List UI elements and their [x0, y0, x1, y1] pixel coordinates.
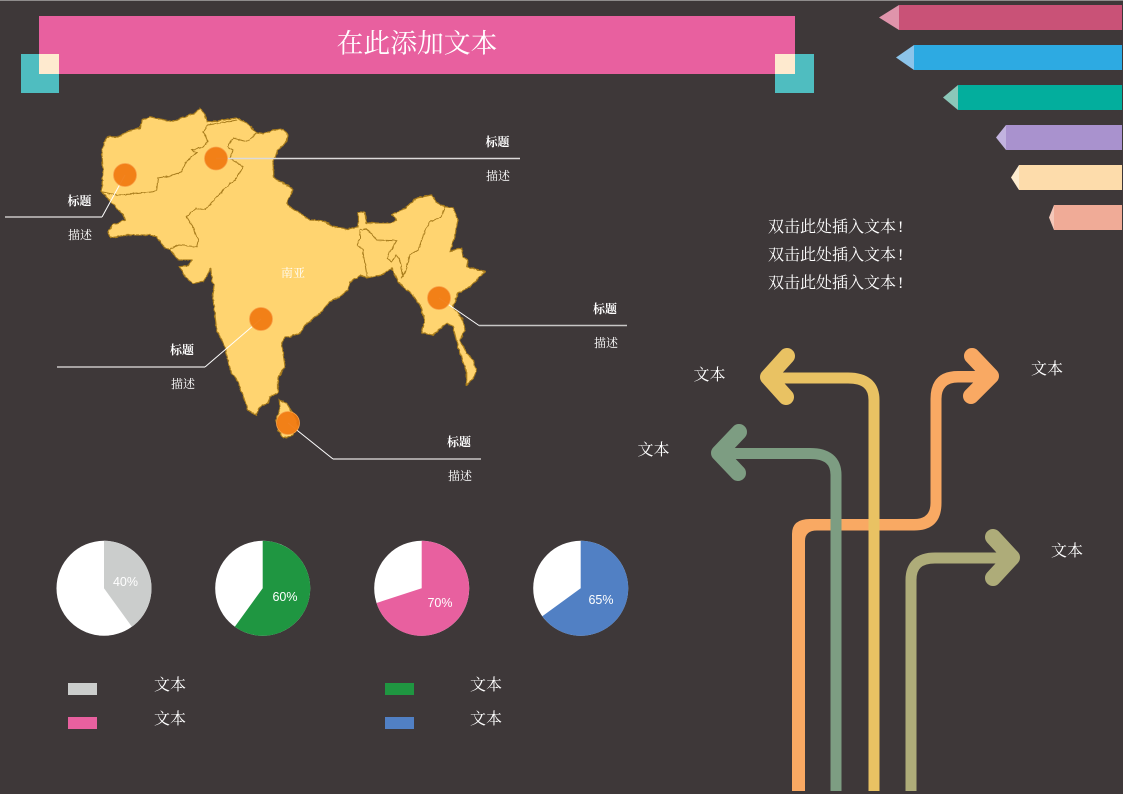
pie chart: 40%: 40% — [113, 575, 138, 589]
pie chart: 65% — [533, 541, 628, 636]
arrow labels: 文本 — [1051, 542, 1083, 560]
map marker: Pakistan callout — [204, 134, 520, 183]
map marker: Myanmar callout: 描述 — [594, 335, 618, 350]
map marker: Sri Lanka callout — [276, 412, 481, 483]
map marker: India callout: 描述 — [171, 376, 195, 391]
arrow labels: 文本 — [694, 366, 726, 384]
legend: 文本 — [154, 710, 186, 728]
text block: 双击此处插入文本! — [768, 217, 903, 236]
map marker: Sri Lanka callout: 描述 — [448, 468, 472, 483]
pie chart: 65%: 65% — [588, 593, 614, 607]
map marker: Sri Lanka callout: 标题 — [447, 434, 471, 449]
pie chart: 40% — [56, 541, 152, 636]
title banner — [21, 16, 814, 93]
text block — [768, 217, 903, 292]
legend: 文本 — [470, 676, 502, 694]
map: South Asia — [102, 108, 485, 438]
title banner: 在此添加文本 — [337, 28, 497, 58]
arrow labels: 文本 — [638, 441, 670, 459]
legend: 文本 — [470, 710, 502, 728]
legend — [68, 676, 502, 729]
map marker: Afghanistan callout — [5, 164, 136, 242]
map marker: Afghanistan callout: 标题 — [67, 193, 92, 208]
pie chart: 70% — [374, 541, 469, 636]
text block: 双击此处插入文本! — [768, 245, 903, 264]
text block: 双击此处插入文本! — [768, 273, 903, 292]
pie chart: 60% — [215, 541, 310, 636]
arrow labels — [638, 360, 1083, 560]
pie chart: 70%: 70% — [427, 596, 453, 610]
arrow: sage green — [719, 432, 836, 791]
legend: 文本 — [154, 676, 186, 694]
colored pencil bars — [879, 5, 1122, 230]
map marker: Pakistan callout: 描述 — [486, 168, 510, 183]
pie chart: 60%: 60% — [272, 590, 298, 604]
arrow: olive — [911, 537, 1012, 791]
map label: 南亚 — [281, 265, 305, 280]
arrow: yellow — [768, 356, 874, 791]
arrow: orange — [792, 356, 991, 791]
map marker: India callout: 标题 — [170, 342, 194, 357]
map marker: Afghanistan callout: 描述 — [68, 227, 92, 242]
map marker: India callout — [57, 308, 272, 391]
map marker: Myanmar callout: 标题 — [593, 301, 617, 316]
map marker: Pakistan callout: 标题 — [485, 134, 510, 149]
map marker: Myanmar callout — [428, 286, 627, 350]
arrow labels: 文本 — [1031, 360, 1063, 378]
